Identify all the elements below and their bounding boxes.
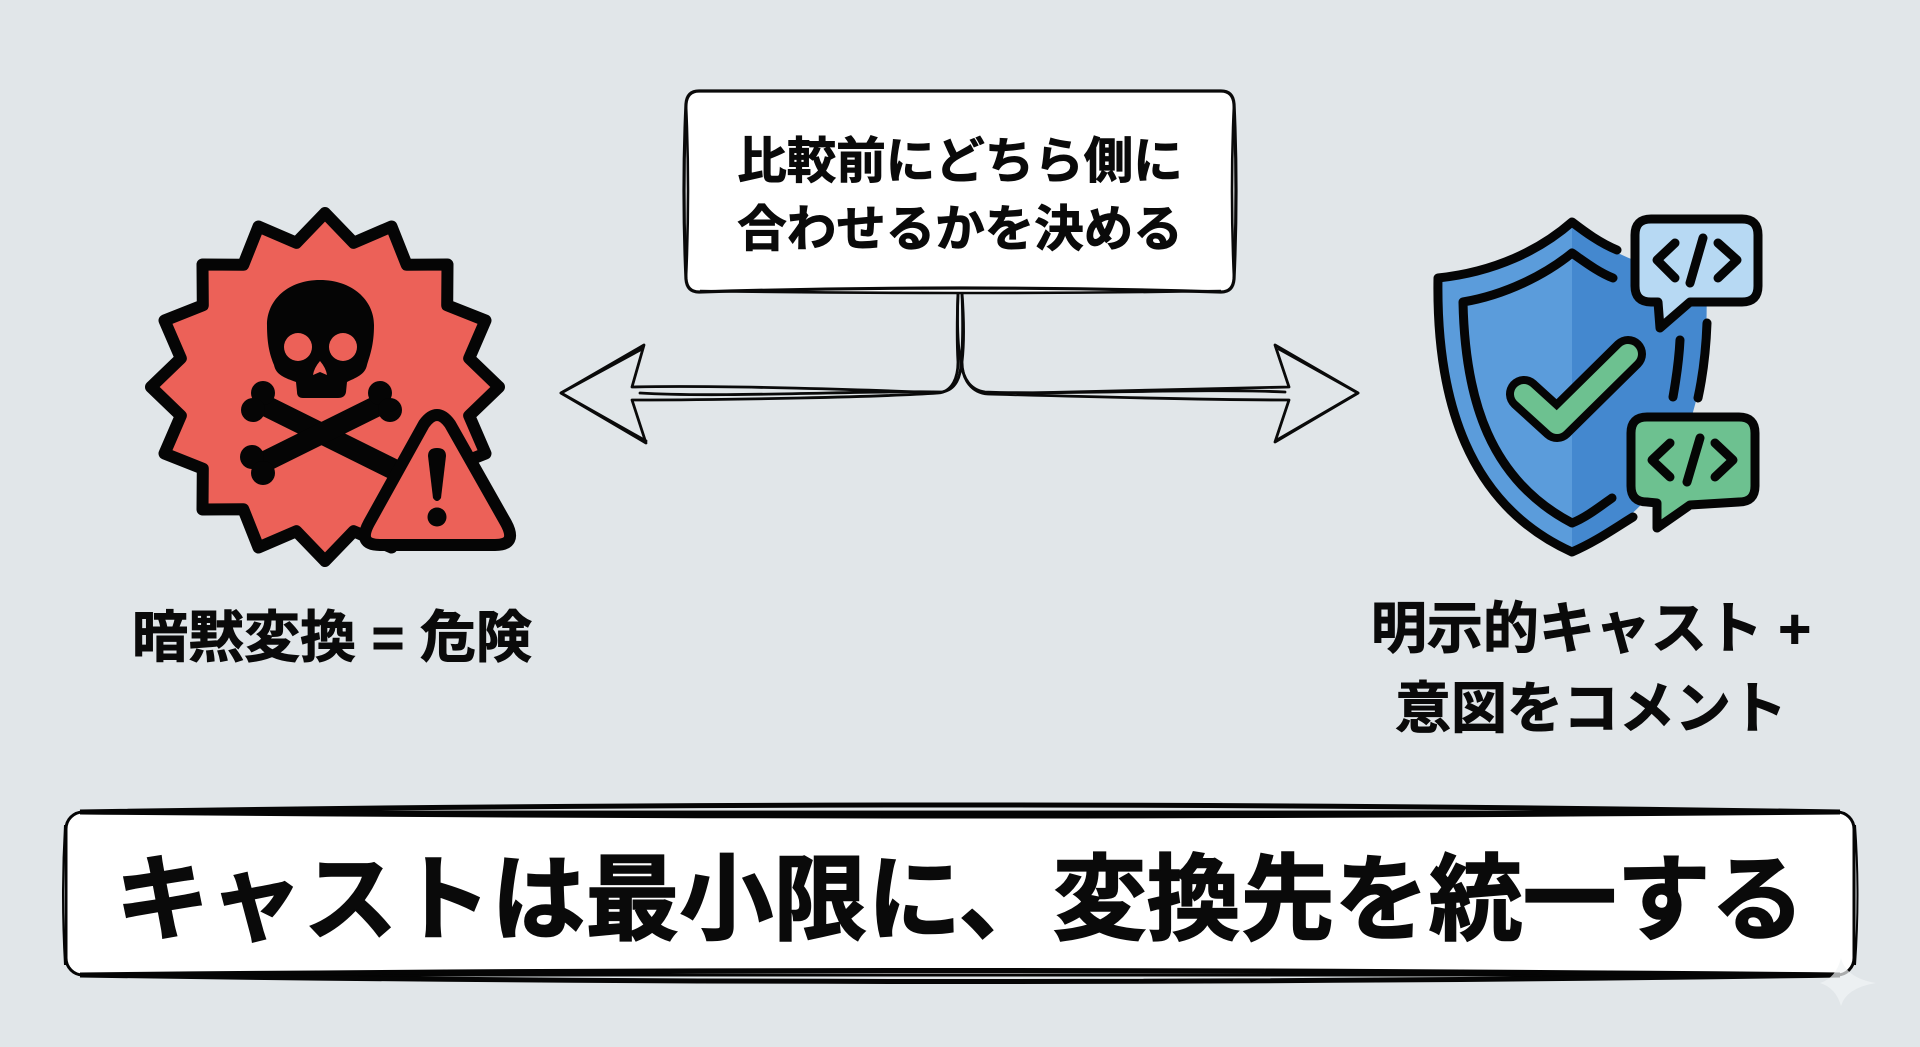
panel: explicit cast with comment bbox=[1371, 219, 1811, 740]
shield fill right half bbox=[1572, 224, 1707, 552]
callout text bbox=[737, 134, 1183, 257]
stem and double-headed arrow bbox=[561, 293, 1358, 443]
crossbones bbox=[240, 381, 402, 485]
shield fill left half bbox=[1440, 224, 1572, 552]
shield outlines bbox=[1438, 222, 1707, 552]
callout box bbox=[684, 91, 1236, 293]
icon: faint sparkle watermark bbox=[1820, 958, 1876, 1006]
panel: implicit conversion danger bbox=[132, 213, 532, 669]
label: explicit cast + comment the intent: 明示的キャスト + bbox=[1371, 597, 1811, 660]
callout text: 合わせるかを決める bbox=[737, 202, 1183, 257]
banner: key takeaway bbox=[63, 805, 1858, 982]
icon: red burst with skull and warning triangle bbox=[151, 213, 510, 561]
code bubble: green bbox=[1631, 417, 1755, 528]
label: implicit conversion = danger: 暗黙変換 = 危険 bbox=[132, 606, 532, 669]
warning triangle bbox=[365, 415, 510, 545]
callout with double-headed arrow bbox=[561, 91, 1358, 443]
icon: shield with check mark and code bubbles bbox=[1438, 219, 1758, 552]
code bubble: blue bbox=[1635, 219, 1758, 328]
callout text: 比較前にどちら側に bbox=[737, 134, 1183, 189]
banner text: キャストは最小限に、変換先を統一する bbox=[115, 847, 1805, 952]
burst badge bbox=[151, 213, 499, 561]
skull bbox=[267, 280, 374, 398]
label: explicit cast + comment the intent: 意図をコメント bbox=[1395, 677, 1787, 740]
label: explicit cast + comment the intent bbox=[1371, 597, 1811, 740]
banner box bbox=[63, 805, 1858, 982]
check mark bbox=[1524, 354, 1628, 424]
